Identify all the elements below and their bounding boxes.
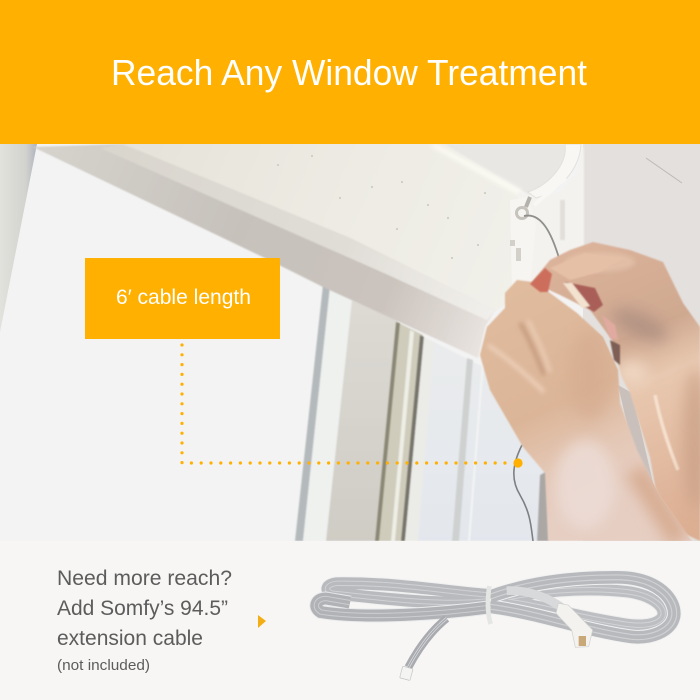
text block: extension cable note: Need more reach? (57, 566, 232, 590)
dotted leader line (182, 345, 523, 468)
photo: hands connecting cable to roller shade (0, 144, 700, 541)
bottom strip panel (0, 541, 700, 700)
right inner loop (497, 590, 663, 625)
wall at right (583, 144, 700, 541)
callout: cable length: 6′ cable length (116, 286, 251, 309)
header band (0, 0, 700, 144)
cable below hand (514, 445, 533, 541)
text block: extension cable note: (not included) (57, 657, 150, 674)
fingertips (530, 253, 625, 365)
right outer loop (490, 577, 674, 637)
text block: extension cable note: Add Somfy’s 94.5” (57, 596, 228, 620)
cable hook and wire at top (516, 197, 559, 258)
thin wire to small connector (400, 618, 447, 681)
text block: extension cable note (57, 566, 232, 674)
scratch on wall (646, 158, 682, 183)
title: Reach Any Window Treatment (111, 52, 587, 93)
inner window frame (295, 285, 549, 541)
roller tube and bracket (430, 144, 584, 296)
icon: arrow (258, 615, 266, 628)
extension cable product image (316, 577, 674, 681)
left lower loop (316, 599, 490, 616)
text block: extension cable note: extension cable (57, 626, 203, 650)
window pane (0, 144, 700, 541)
left window frame (0, 144, 37, 332)
large connector (507, 591, 593, 647)
right hand and forearm (532, 242, 700, 541)
gap shadow between arms (618, 385, 656, 495)
bottom rail of shade (33, 144, 495, 358)
fabric shade (123, 144, 522, 312)
left upper loop (327, 583, 490, 602)
left hand and forearm (480, 280, 692, 541)
callout: cable length (85, 258, 280, 339)
cable tie (488, 586, 491, 624)
